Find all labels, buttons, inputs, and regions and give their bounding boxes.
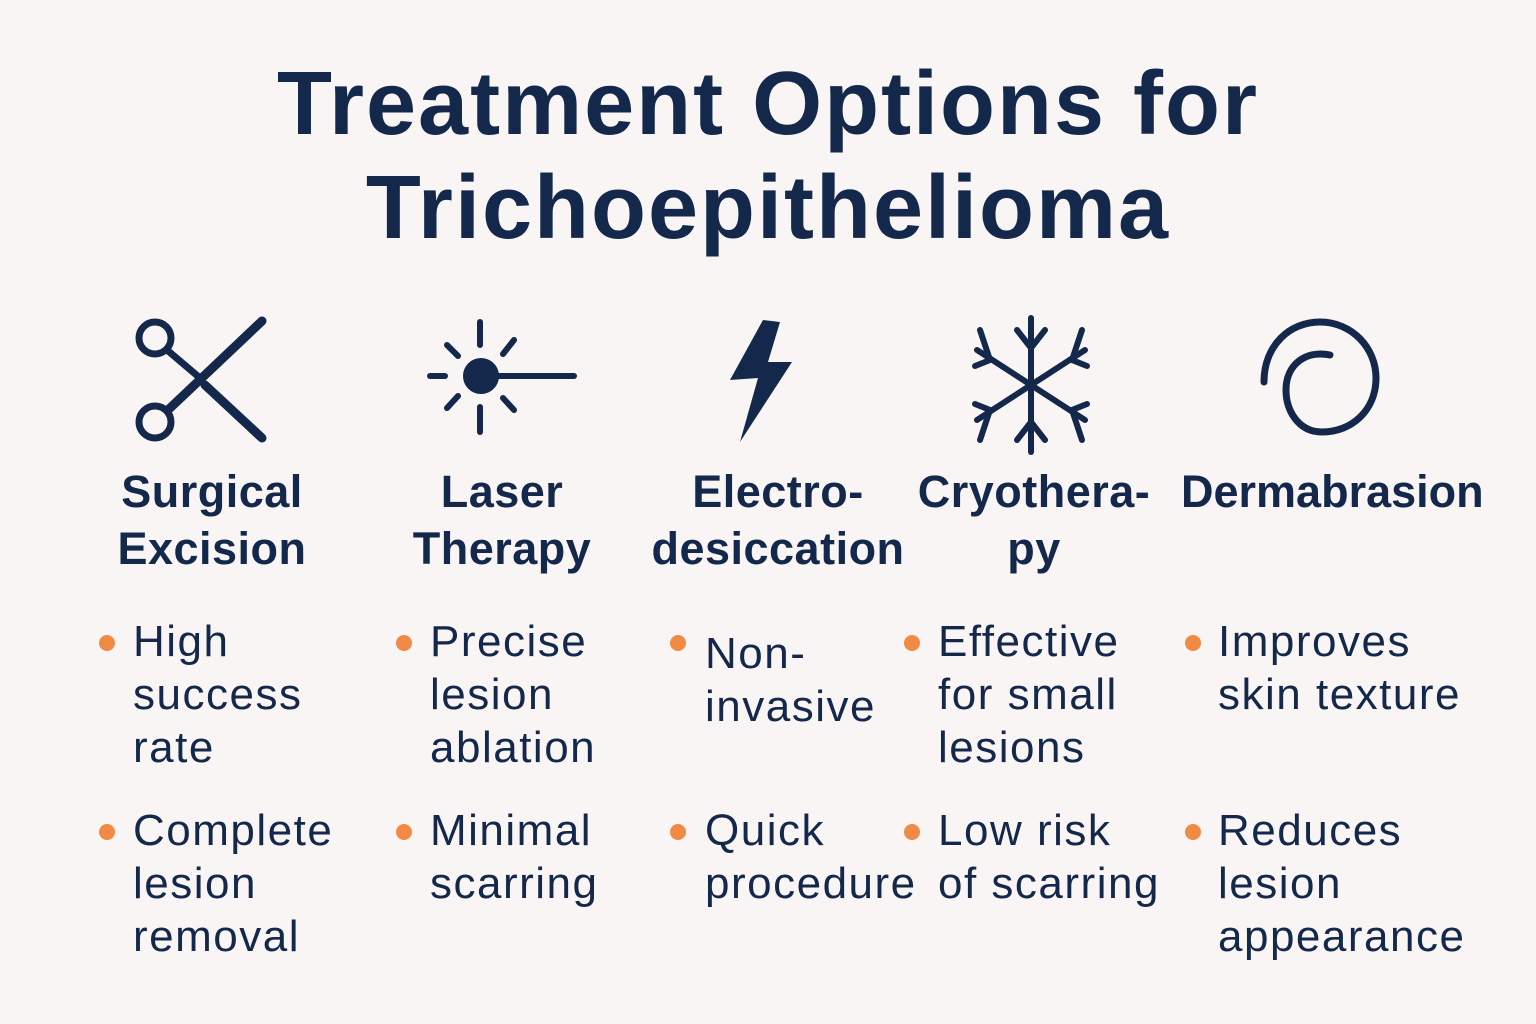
bullets: cryo: of scarring	[938, 859, 1160, 908]
bullets: surgical: success	[133, 670, 302, 719]
bullets: dermabrasion: skin texture	[1218, 670, 1461, 719]
icon: snowflake	[975, 318, 1087, 452]
heading: cryotherapy	[918, 466, 1150, 574]
bullets: surgical: High	[133, 617, 230, 666]
bullets: dermabrasion: Improves	[1218, 617, 1411, 666]
heading: laser therapy: Laser	[441, 466, 563, 517]
bullets: surgical: Complete	[133, 806, 333, 855]
icon: spiral	[1264, 322, 1376, 432]
bullets: cryo: Low risk	[938, 806, 1111, 855]
heading: surgical excision	[117, 466, 307, 574]
icon: lightning bolt	[730, 320, 792, 442]
bullets: dermabrasion: appearance	[1218, 912, 1465, 961]
bullets: surgical: lesion	[133, 859, 257, 908]
bullets: laser	[396, 617, 598, 908]
title: Treatment Options for	[277, 54, 1259, 154]
bullets: laser: lesion	[430, 670, 554, 719]
bullets: surgical: removal	[133, 912, 300, 961]
bullets: dermabrasion: Reduces	[1218, 806, 1402, 855]
heading: cryotherapy: py	[1007, 523, 1061, 574]
icon: laser	[430, 322, 574, 432]
heading: electrodesiccation: Electro-	[692, 466, 864, 517]
bullets: cryo: lesions	[938, 723, 1085, 772]
bullets: dermabrasion	[1185, 617, 1465, 961]
bullets: cryo: for small	[938, 670, 1118, 719]
bullets: electro: Non-	[705, 629, 806, 678]
heading: electrodesiccation	[651, 466, 905, 574]
title: Trichoepithelioma	[366, 158, 1170, 258]
bullets: electro: procedure	[705, 859, 917, 908]
bullets: laser: Precise	[430, 617, 587, 666]
bullets: surgical	[99, 617, 333, 961]
bullets: laser: Minimal	[430, 806, 592, 855]
bullets: electro: invasive	[705, 682, 876, 731]
bullets: electro: Quick	[705, 806, 825, 855]
heading: surgical excision: Excision	[117, 523, 307, 574]
heading: cryotherapy: Cryothera-	[918, 466, 1150, 517]
bullets: laser: scarring	[430, 859, 598, 908]
heading: surgical excision: Surgical	[121, 466, 303, 517]
bullets: laser: ablation	[430, 723, 596, 772]
heading: electrodesiccation: desiccation	[651, 523, 905, 574]
heading: dermabrasion: Dermabrasion	[1181, 466, 1484, 517]
bullets: cryo: Effective	[938, 617, 1119, 666]
icon: scissors	[139, 321, 262, 438]
heading: laser therapy	[413, 466, 591, 574]
icons	[136, 315, 1380, 455]
bullets: surgical: rate	[133, 723, 215, 772]
bullets: cryo	[904, 617, 1160, 908]
title	[277, 54, 1259, 258]
bullets: electro	[670, 629, 917, 908]
bullets: dermabrasion: lesion	[1218, 859, 1342, 908]
heading: laser therapy: Therapy	[413, 523, 591, 574]
